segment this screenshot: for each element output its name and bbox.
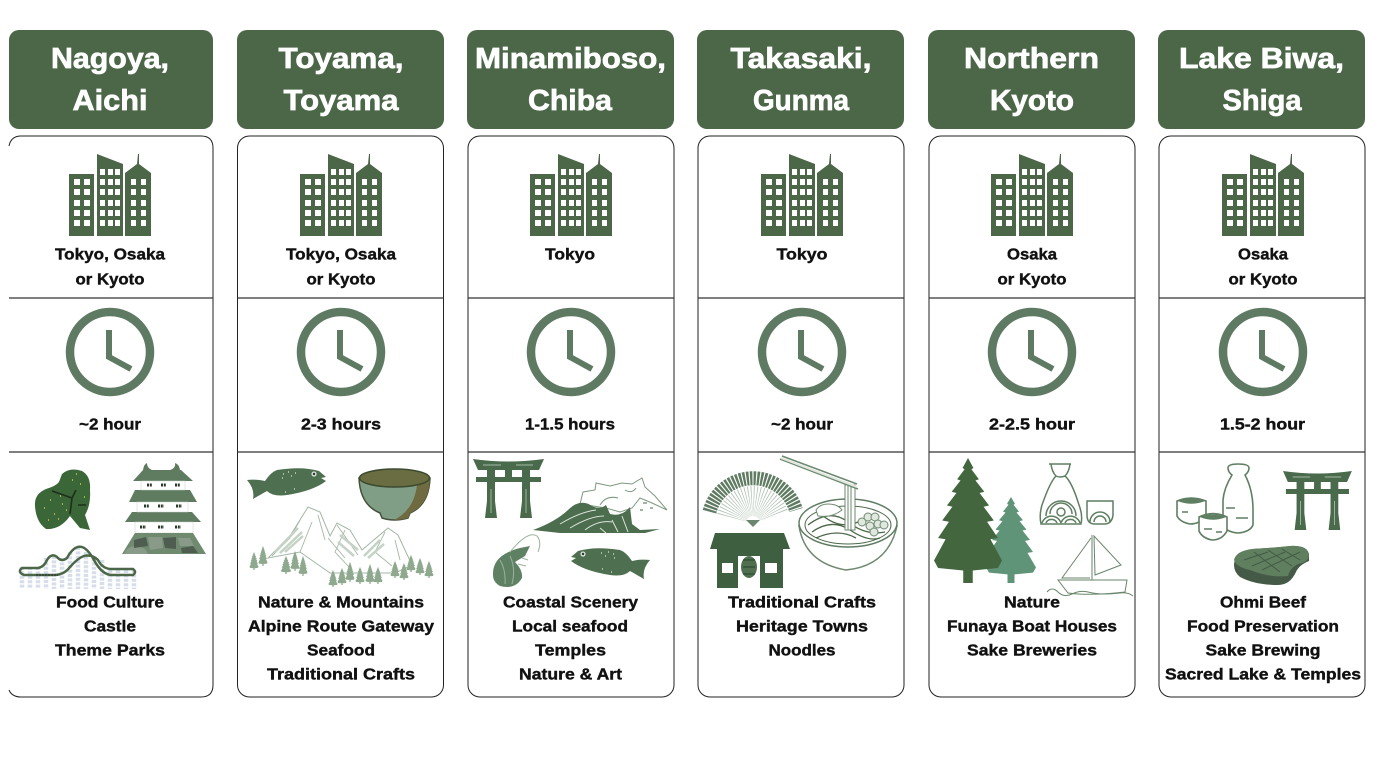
illustration: fish: [247, 468, 326, 499]
attractions list: [947, 595, 1117, 660]
departure cities: or Kyoto: [76, 272, 145, 289]
attractions list: Alpine Route Gateway: [248, 619, 434, 636]
card outline: [698, 136, 904, 697]
illustration: torii gate: [473, 459, 544, 518]
departure cities: or Kyoto: [306, 272, 376, 289]
icon: city buildings: [530, 154, 612, 236]
column: Minamiboso, Chiba: [467, 30, 674, 697]
travel time: 1-1.5 hours: [525, 417, 615, 434]
attractions list: Theme Parks: [55, 643, 165, 660]
departure cities: or Kyoto: [1228, 272, 1298, 289]
attractions list: Nature: [1004, 595, 1060, 612]
departure cities: Tokyo, Osaka: [55, 247, 165, 264]
card outline: [468, 136, 674, 697]
illustration: beef steak: [1234, 546, 1309, 585]
travel time: ~2 hour: [79, 417, 141, 434]
illustration: sailboat: [1047, 535, 1133, 596]
attractions list: Sacred Lake & Temples: [1165, 667, 1361, 684]
attractions list: Traditional Crafts: [267, 667, 415, 684]
attractions list: Ohmi Beef: [1220, 595, 1307, 612]
attractions list: Local seafood: [512, 619, 628, 636]
icon: clock: [301, 312, 381, 392]
icon: clock: [762, 312, 842, 392]
departure city: Tokyo: [776, 247, 828, 264]
heading: Lake Biwa, Shiga: Lake Biwa,: [1179, 43, 1344, 75]
heading: Toyama, Toyama: Toyama,: [278, 43, 404, 75]
illustration: bowl: [359, 469, 430, 520]
attractions list: Nature & Art: [519, 667, 623, 684]
icon: city buildings: [761, 154, 843, 236]
departure cities: [55, 247, 165, 289]
column: Toyama, Toyama: [237, 30, 444, 697]
departure cities: Osaka: [1007, 247, 1057, 264]
column: Takasaki, Gunma: [697, 30, 904, 697]
icon: clock: [531, 312, 611, 392]
heading: Minamiboso, Chiba: Minamiboso,: [475, 43, 666, 75]
heading: Lake Biwa, Shiga: Shiga: [1222, 85, 1302, 117]
heading: Northern Kyoto: Northern: [964, 43, 1099, 75]
illustration: noodle bowl: [780, 456, 897, 570]
illustration: temple gate: [710, 533, 790, 588]
icon: clock: [992, 312, 1072, 392]
heading: Takasaki, Gunma: Takasaki,: [730, 43, 872, 75]
card outline: [238, 136, 444, 697]
illustration: fish: [571, 548, 650, 579]
illustration: wave: [533, 478, 667, 533]
departure cities: [1228, 247, 1298, 289]
illustration: folding fan: [710, 478, 796, 527]
attractions list: Sake Brewing: [1206, 643, 1320, 660]
card outline: [9, 136, 213, 697]
departure cities: [286, 247, 396, 289]
attractions list: Coastal Scenery: [503, 595, 638, 612]
travel time: 2-2.5 hour: [989, 417, 1075, 434]
illustration: sake set: [1177, 464, 1253, 540]
heading: Minamiboso, Chiba: Chiba: [528, 85, 613, 117]
attractions list: [1165, 595, 1361, 684]
illustration: castle: [122, 463, 206, 554]
heading: Minamiboso, Chiba: [467, 30, 674, 129]
departure cities: Tokyo, Osaka: [286, 247, 396, 264]
icon: city buildings: [300, 154, 382, 236]
icon: city buildings: [1222, 154, 1304, 236]
attractions list: Castle: [84, 619, 136, 636]
illustration: pine trees: [934, 458, 1036, 583]
departure cities: [998, 247, 1067, 289]
departure cities: Osaka: [1238, 247, 1288, 264]
attractions list: Heritage Towns: [736, 619, 868, 636]
heading: Nagoya, Aichi: Nagoya,: [51, 43, 169, 75]
attractions list: [55, 595, 165, 660]
travel time: ~2 hour: [771, 417, 833, 434]
travel time: 1.5-2 hour: [1220, 417, 1305, 434]
attractions list: Traditional Crafts: [728, 595, 876, 612]
attractions list: Food Culture: [56, 595, 164, 612]
attractions list: Funaya Boat Houses: [947, 619, 1117, 636]
departure city: Tokyo: [545, 247, 595, 264]
card outline: [1159, 136, 1365, 697]
attractions list: Seafood: [307, 643, 375, 660]
heading: Nagoya, Aichi: [9, 30, 213, 129]
attractions list: Noodles: [768, 643, 836, 660]
departure cities: or Kyoto: [998, 272, 1067, 289]
illustration: roller coaster: [20, 547, 135, 589]
heading: Toyama, Toyama: [237, 30, 444, 129]
travel time: 2-3 hours: [301, 417, 381, 434]
heading: Northern Kyoto: [928, 30, 1135, 129]
attractions list: Temples: [535, 643, 606, 660]
icon: city buildings: [991, 154, 1073, 236]
icon: clock: [70, 312, 150, 392]
heading: Takasaki, Gunma: Gunma: [753, 85, 850, 117]
illustration: torii gate: [1283, 471, 1352, 530]
attractions list: Food Preservation: [1187, 619, 1339, 636]
column: Northern Kyoto: [928, 30, 1135, 697]
heading: Toyama, Toyama: Toyama: [284, 85, 399, 117]
attractions list: Nature & Mountains: [258, 595, 424, 612]
illustration: sake flask and cup: [1040, 464, 1113, 524]
heading: Nagoya, Aichi: Aichi: [72, 85, 148, 117]
illustration: shrimp: [493, 535, 540, 587]
attractions list: Sake Breweries: [967, 643, 1097, 660]
column: Nagoya, Aichi: [9, 30, 213, 697]
attractions list: [728, 595, 876, 660]
card outline: [929, 136, 1135, 697]
heading: Takasaki, Gunma: [697, 30, 904, 129]
icon: city buildings: [69, 154, 151, 236]
icon: clock: [1223, 312, 1303, 392]
attractions list: [503, 595, 638, 684]
column: Lake Biwa, Shiga: [1158, 30, 1365, 697]
attractions list: [248, 595, 434, 684]
heading: Northern Kyoto: Kyoto: [990, 85, 1074, 117]
illustration: food figure: [35, 470, 90, 530]
heading: Lake Biwa, Shiga: [1158, 30, 1365, 129]
illustration: mountains and forest: [250, 507, 434, 587]
